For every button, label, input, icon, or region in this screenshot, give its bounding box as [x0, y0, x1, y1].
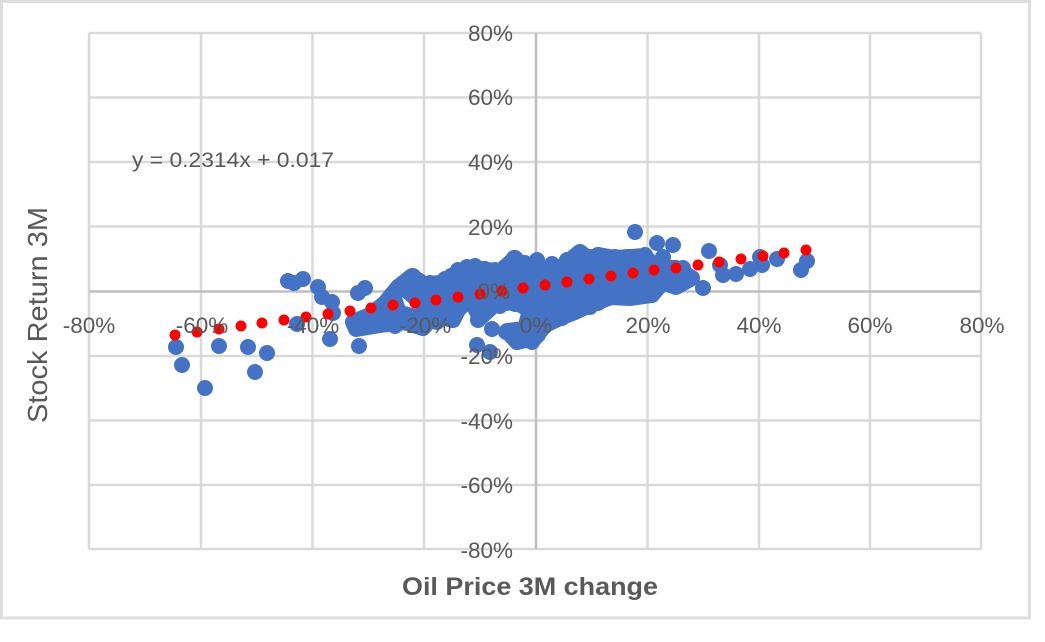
x axis tick labels: -60% — [176, 313, 228, 338]
y axis tick labels: 60% — [468, 85, 513, 110]
y axis tick labels: -40% — [460, 409, 513, 434]
x axis tick labels: -40% — [287, 313, 339, 338]
y axis tick labels: 0% — [477, 279, 510, 304]
x axis tick labels: 60% — [847, 313, 893, 338]
y axis title: Stock Return 3M — [22, 207, 53, 423]
y axis tick labels: 80% — [468, 21, 513, 46]
x axis tick labels: -20% — [399, 313, 451, 338]
y axis tick labels: 20% — [468, 215, 513, 240]
y axis tick labels: -20% — [460, 344, 513, 369]
blue data points — [176, 232, 807, 388]
x axis tick labels: 40% — [736, 313, 782, 338]
red trend line points — [175, 250, 806, 335]
y axis tick labels — [460, 21, 513, 563]
y axis tick labels: -80% — [460, 538, 513, 563]
x axis tick labels: 20% — [625, 313, 671, 338]
y axis tick labels: -60% — [460, 473, 513, 498]
x axis tick labels: 0% — [520, 313, 552, 338]
y axis tick labels: 40% — [468, 150, 513, 175]
cluster edge points — [380, 252, 652, 342]
x axis tick labels — [63, 313, 1005, 338]
outlying points — [176, 232, 807, 388]
x axis tick labels: 80% — [959, 313, 1005, 338]
trendline equation: y = 0.2314x + 0.017 — [132, 149, 334, 172]
x axis tick labels: -80% — [63, 313, 115, 338]
dense central cluster — [353, 252, 692, 342]
x axis title: Oil Price 3M change — [402, 573, 658, 601]
